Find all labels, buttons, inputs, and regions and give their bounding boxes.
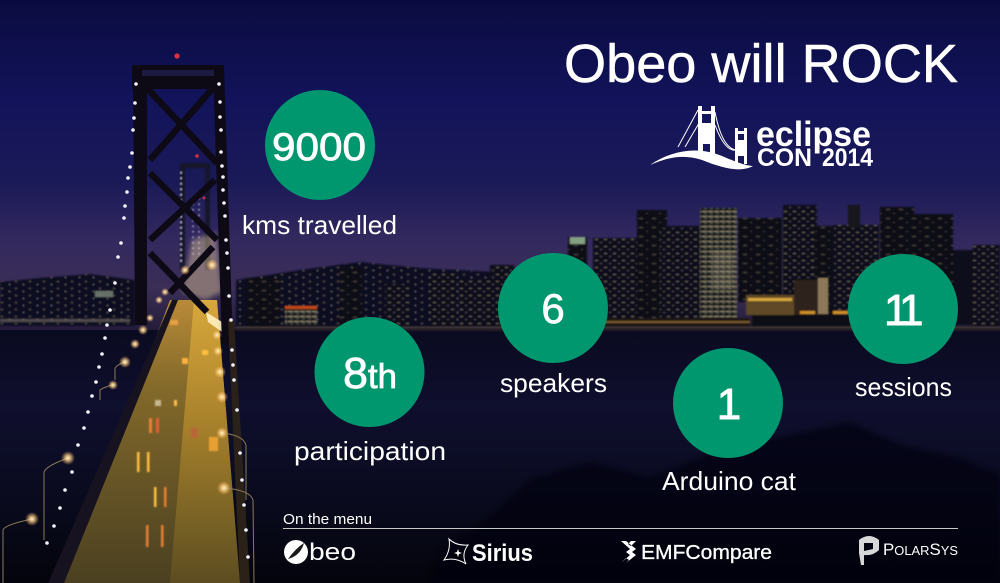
green circle xyxy=(673,348,783,458)
logo: EMF Compare xyxy=(621,541,772,564)
logo: Sirius xyxy=(444,539,533,567)
logo wordmark eclipse: eclipse xyxy=(756,115,871,154)
road deck xyxy=(63,300,240,583)
car light trails xyxy=(137,320,218,547)
bay water xyxy=(0,330,1000,583)
icon: PolarSys P xyxy=(859,536,879,565)
label: participation xyxy=(294,436,446,466)
stat: 6 speakers xyxy=(498,253,608,398)
night sky xyxy=(0,0,1000,335)
icon: Obeo disc with feather xyxy=(284,540,308,564)
green circle xyxy=(314,317,424,427)
number: 6 xyxy=(541,285,565,332)
title: Obeo will ROCK xyxy=(564,34,958,94)
number: 8th xyxy=(343,349,397,398)
bright lit span near the tower xyxy=(206,312,222,332)
number: 1 xyxy=(717,380,741,429)
green circle xyxy=(848,254,958,364)
bridge xyxy=(3,53,254,583)
distant tower xyxy=(180,163,210,270)
number: 1 xyxy=(884,286,908,335)
footer: on the menu xyxy=(283,511,958,567)
logo bridge icon xyxy=(650,106,753,169)
EMF Compare wordmark: EMFCompare xyxy=(641,542,772,564)
label: kms travelled xyxy=(242,210,397,240)
footer heading: On the menu xyxy=(283,511,372,528)
railing left xyxy=(48,300,178,583)
logo wordmark CON: CON xyxy=(757,144,812,172)
suspension cable lights xyxy=(45,82,250,559)
number: 9000 xyxy=(272,126,366,169)
logo: Obeo xyxy=(284,539,356,566)
Obeo wordmark: beo xyxy=(309,539,356,566)
skyline right of the bridge xyxy=(236,205,1000,332)
logo wordmark 2014: 2014 xyxy=(822,144,873,172)
stat: 8th participation xyxy=(294,317,446,466)
label: speakers xyxy=(500,368,607,398)
label: sessions xyxy=(855,372,952,402)
stat: 1 Arduino cat xyxy=(662,348,797,496)
foreground tree silhouettes xyxy=(430,422,1000,583)
stat: 9000 kms travelled xyxy=(242,90,397,240)
green circle xyxy=(265,90,375,200)
street lamp glows xyxy=(25,259,231,526)
icon: EMF Compare cross xyxy=(621,541,636,563)
icon: Sirius star xyxy=(444,539,468,564)
number: 1 xyxy=(899,286,923,335)
distant city left of the bridge xyxy=(0,274,135,326)
lamp posts xyxy=(3,362,254,583)
logo: PolarSys xyxy=(859,536,958,565)
logo: EclipseCon 2014 xyxy=(650,106,873,172)
label: Arduino cat xyxy=(662,466,797,496)
green circle xyxy=(498,253,608,363)
stat: 11 sessions xyxy=(848,254,958,402)
PolarSys wordmark: POLARSYS xyxy=(883,540,958,559)
tower legs and bracing xyxy=(132,65,233,345)
Sirius wordmark: Sirius xyxy=(472,540,533,567)
